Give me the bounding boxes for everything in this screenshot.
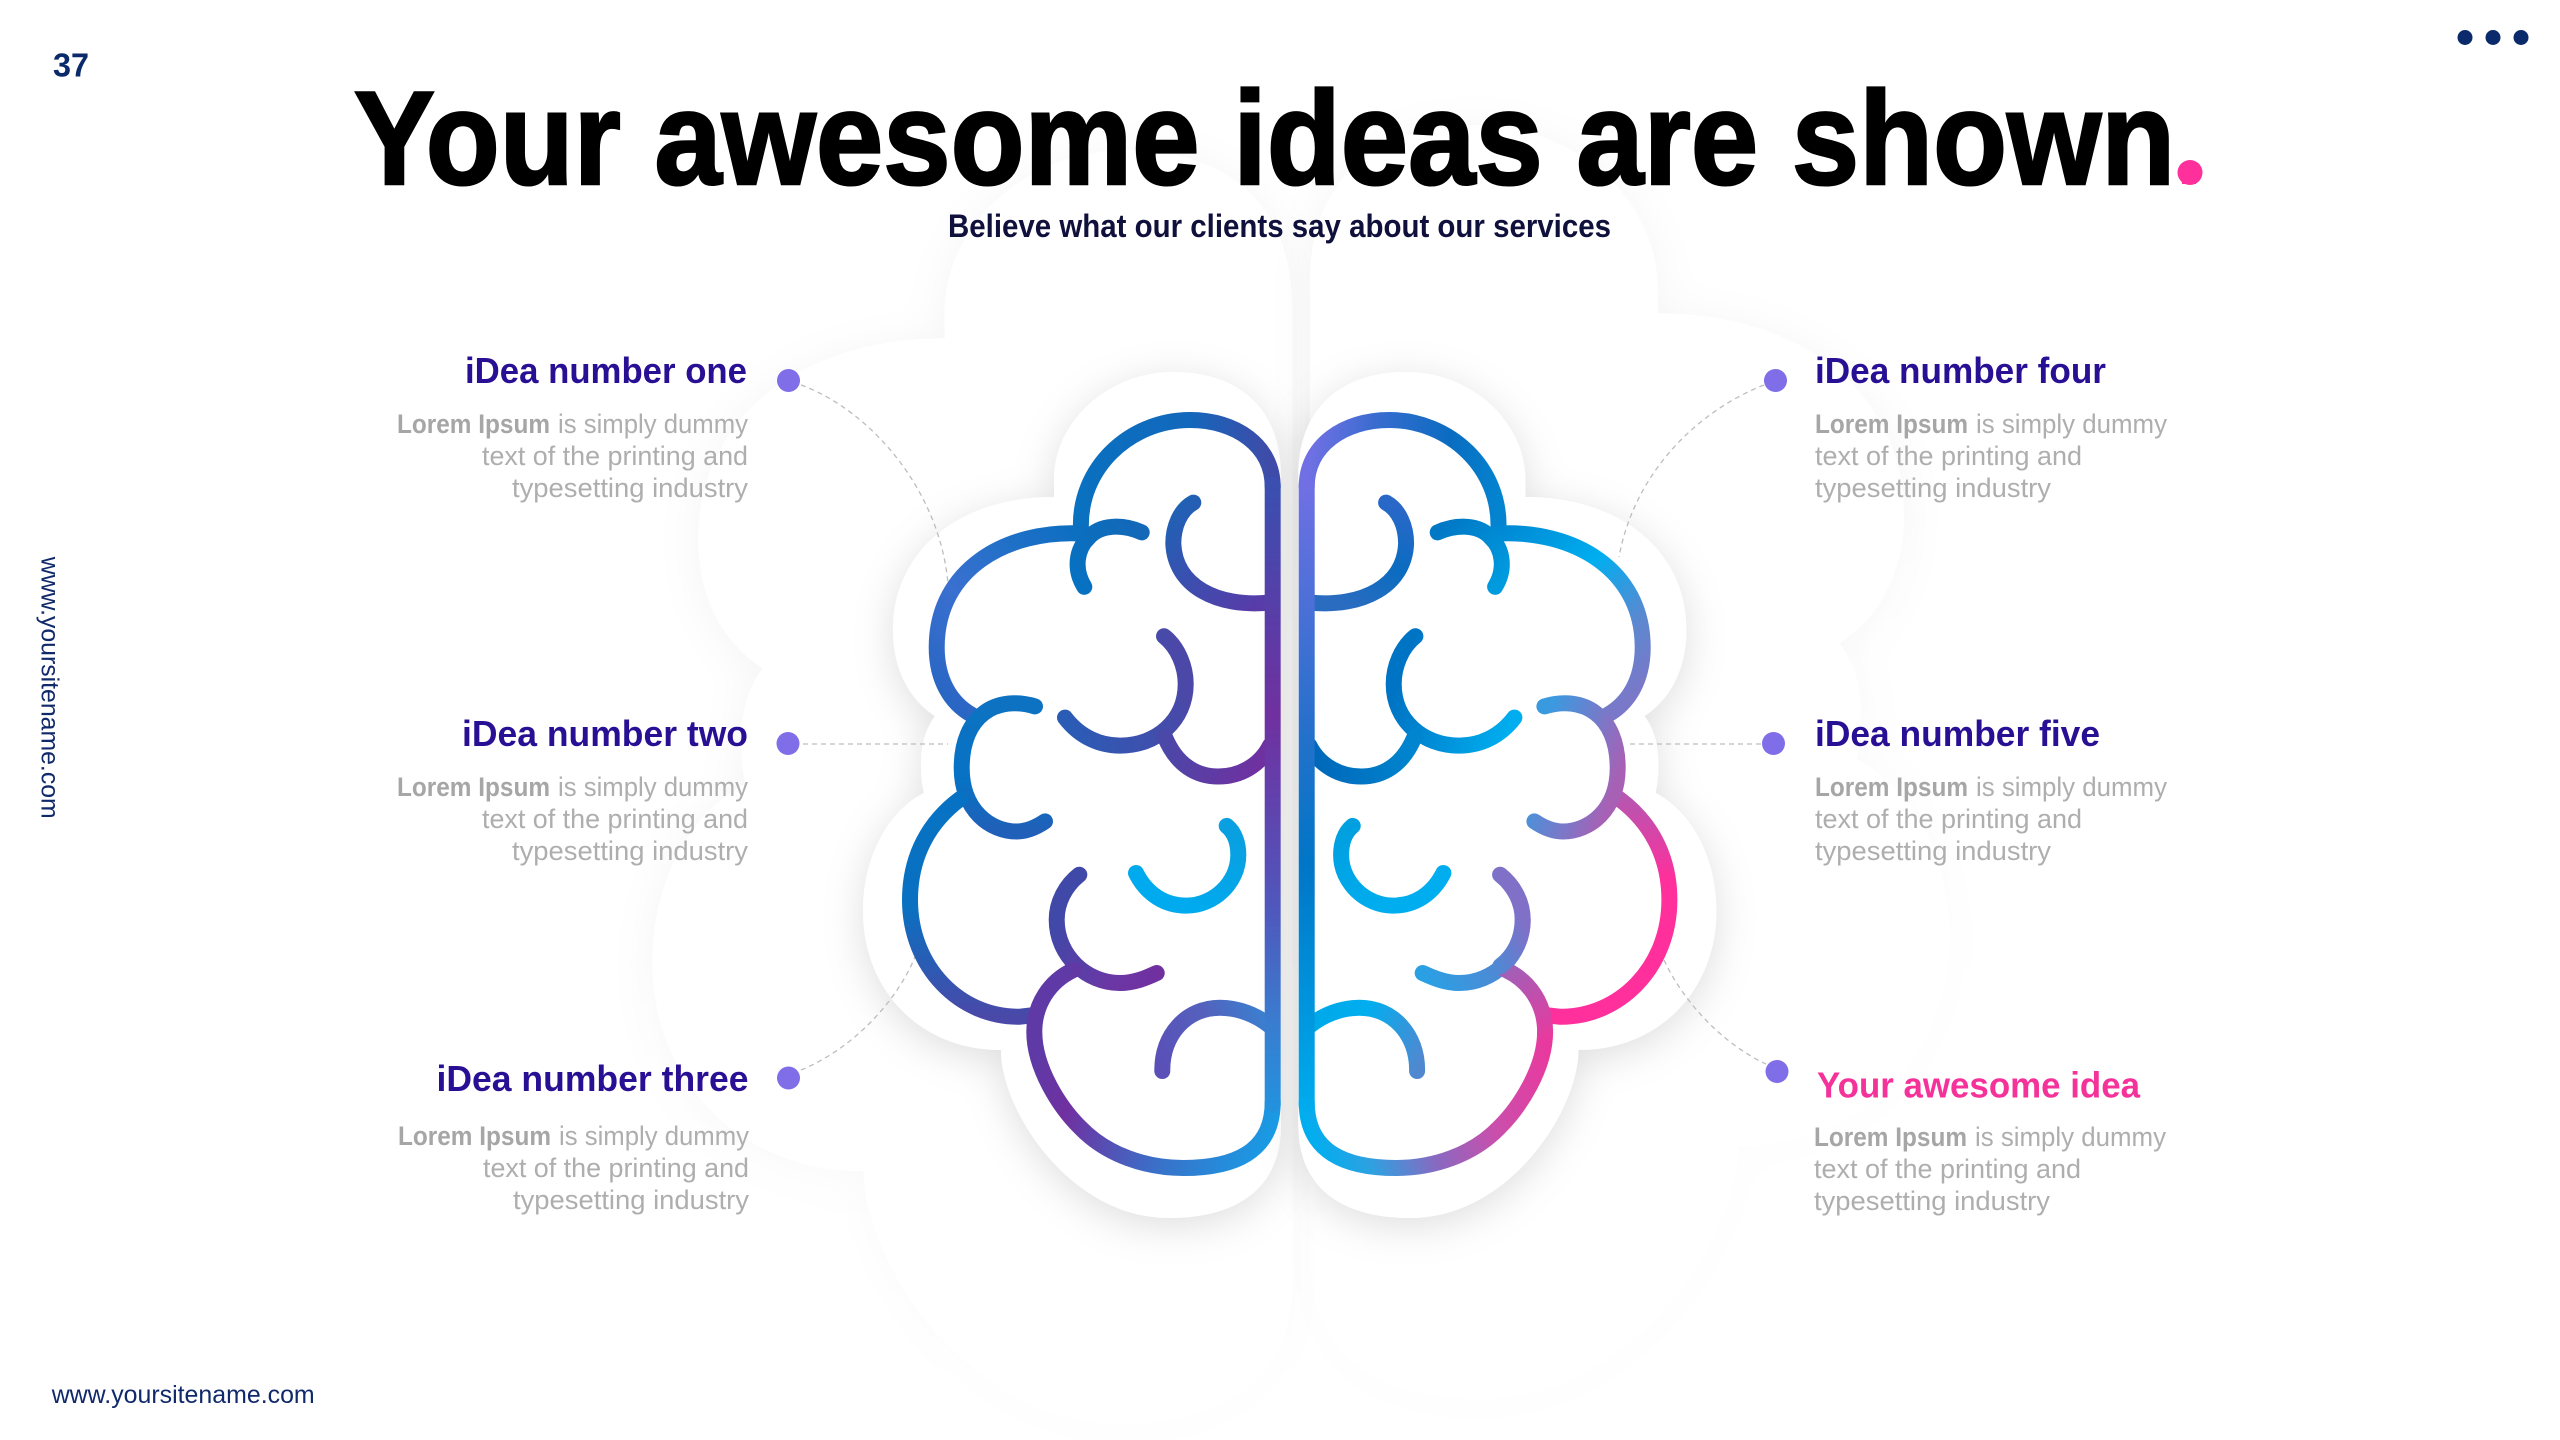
body text bbox=[1815, 772, 2167, 866]
body text: is simply dummy bbox=[559, 1121, 749, 1151]
subtitle: Believe what our clients say about our services bbox=[948, 208, 1611, 244]
body text: is simply dummy bbox=[558, 409, 748, 439]
body text: text of the printing and bbox=[1815, 441, 2082, 471]
marker dot bbox=[777, 369, 800, 392]
heading: iDea number three bbox=[436, 1058, 748, 1099]
heading: iDea number four bbox=[1815, 350, 2106, 391]
body text bbox=[397, 772, 749, 866]
left hemisphere sticker bbox=[863, 372, 1281, 1218]
body text bbox=[1815, 409, 2167, 503]
body text: is simply dummy bbox=[1976, 409, 2167, 439]
marker dot bbox=[1762, 732, 1785, 755]
marker dot bbox=[777, 1066, 800, 1090]
body text: Lorem Ipsum bbox=[1814, 1122, 1967, 1152]
body text: is simply dummy bbox=[1975, 1122, 2166, 1152]
footer site url: www.yoursitename.com bbox=[51, 1381, 315, 1409]
panel: idea three bbox=[398, 1058, 800, 1215]
body text: text of the printing and bbox=[482, 441, 748, 471]
body text: is simply dummy bbox=[558, 772, 748, 802]
marker dot bbox=[776, 732, 800, 755]
body text: text of the printing and bbox=[1814, 1154, 2081, 1184]
body text: Lorem Ipsum bbox=[397, 409, 550, 439]
body text: is simply dummy bbox=[1976, 772, 2167, 802]
marker dot bbox=[1764, 369, 1787, 392]
body text: typesetting industry bbox=[1814, 1186, 2051, 1216]
connector lines bbox=[801, 385, 1766, 1070]
heading: Your awesome idea bbox=[1817, 1064, 2141, 1106]
heading: iDea number one bbox=[465, 350, 747, 391]
body text: Lorem Ipsum bbox=[398, 1121, 551, 1151]
heading: iDea number two bbox=[462, 713, 748, 754]
title: Your awesome ideas are shown. bbox=[354, 65, 2203, 213]
body text: Lorem Ipsum bbox=[1815, 409, 1968, 439]
panel: idea two bbox=[397, 713, 800, 866]
body text: text of the printing and bbox=[483, 1153, 749, 1183]
heading: iDea number five bbox=[1815, 713, 2100, 754]
panel: your awesome idea bbox=[1766, 1060, 2166, 1216]
body text: Lorem Ipsum bbox=[1815, 772, 1968, 802]
menu dots icon bbox=[2458, 30, 2528, 45]
page number: 37 bbox=[53, 47, 89, 84]
brain: right hemisphere bbox=[1307, 420, 1669, 1168]
right hemisphere sticker bbox=[1298, 372, 1716, 1218]
brain: left hemisphere bbox=[910, 420, 1273, 1168]
panel: idea five bbox=[1762, 713, 2167, 866]
body text bbox=[397, 409, 749, 503]
body text bbox=[398, 1121, 750, 1215]
marker dot bbox=[1766, 1060, 1788, 1083]
body text: typesetting industry bbox=[513, 1185, 750, 1215]
panel: idea one bbox=[397, 350, 800, 503]
body text: text of the printing and bbox=[482, 804, 748, 834]
body text: typesetting industry bbox=[512, 836, 749, 866]
body text: text of the printing and bbox=[1815, 804, 2082, 834]
panel: idea four bbox=[1764, 350, 2167, 503]
background: ghost brain outlines bbox=[652, 125, 1950, 1424]
vertical site url: www.yoursitename.com bbox=[36, 556, 64, 819]
body text: typesetting industry bbox=[1815, 473, 2052, 503]
body text bbox=[1814, 1122, 2166, 1216]
body text: typesetting industry bbox=[512, 473, 749, 503]
body text: Lorem Ipsum bbox=[397, 772, 550, 802]
body text: typesetting industry bbox=[1815, 836, 2052, 866]
